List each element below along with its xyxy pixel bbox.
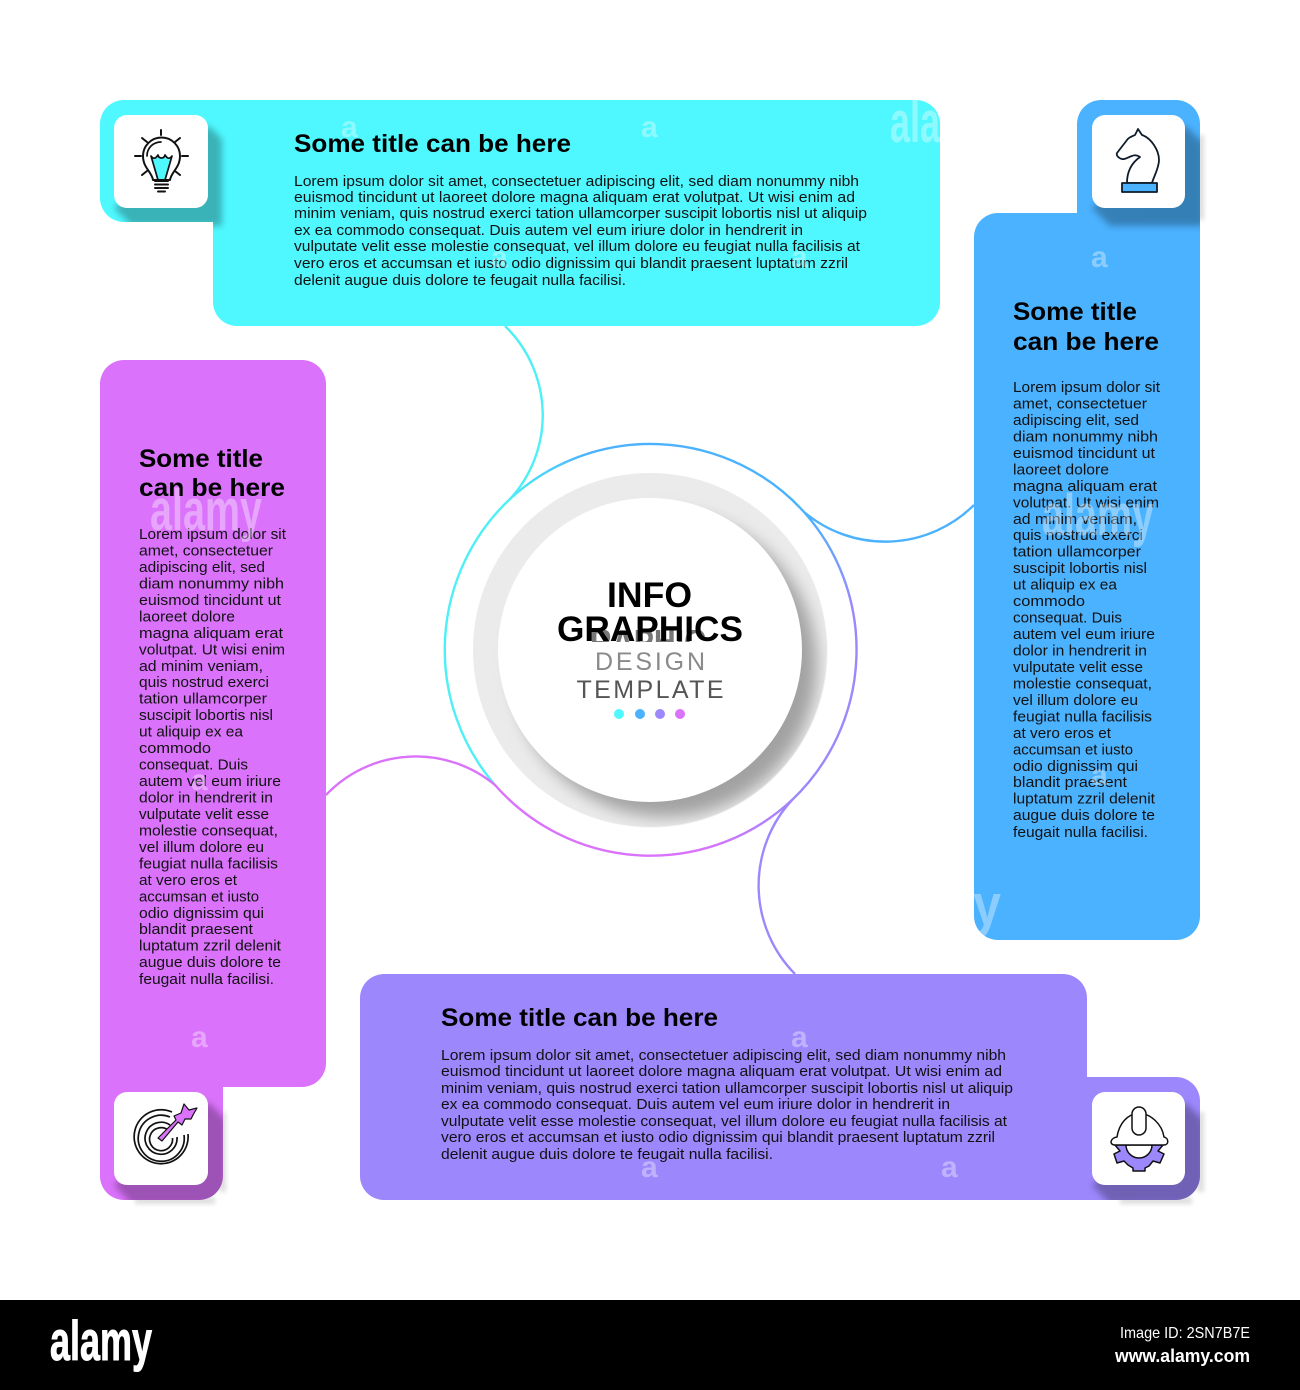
footer credits: Image ID: 2SN7B7E (1120, 1325, 1250, 1342)
body text: euismod tincidunt ut laoreet dolore magna aliquam erat volutpat. Ut wisi enim ad (294, 189, 855, 206)
central circle (473, 473, 827, 827)
body text: diam nonummy nibh (139, 575, 284, 592)
icon: light bulb (135, 130, 188, 192)
body text: vero eros et accumsan et iusto odio dignissim qui blandit praesent luptatum zzril (441, 1129, 995, 1146)
icon: chess knight (1117, 129, 1159, 192)
watermark overlays: a (791, 241, 808, 274)
body text: diam nonummy nibh (1013, 428, 1158, 445)
watermark overlays: a (1091, 759, 1108, 792)
body text: molestie consequat, (1013, 675, 1152, 692)
center title: RAPHIC (590, 623, 706, 662)
body text: volutpat. Ut wisi enim (1013, 494, 1159, 511)
watermark overlays: a (491, 241, 508, 274)
watermark overlays: a (791, 1021, 808, 1054)
soft outer panel shadows (135, 135, 1204, 1204)
body text: ut aliquip ex ea (139, 724, 244, 741)
body text: accumsan et iusto (1013, 741, 1133, 758)
body text: Lorem ipsum dolor sit amet, consectetuer adipiscing elit, sed diam nonummy nibh (441, 1047, 1006, 1064)
watermark overlays (150, 90, 1154, 1184)
watermark overlays: a (1091, 241, 1108, 274)
heading: can be here (1013, 328, 1159, 356)
body text: vulputate velit esse (1013, 659, 1143, 676)
body text: adipiscing elit, sed (1013, 412, 1139, 429)
icon: target with arrow (134, 1104, 197, 1164)
body text: tation ullamcorper (1013, 544, 1141, 561)
body text (1013, 379, 1161, 841)
connector curves (326, 326, 974, 974)
panel: bottom purple (360, 974, 1204, 1204)
body text: molestie consequat, (139, 822, 278, 839)
body text: euismod tincidunt ut (1013, 445, 1156, 462)
panel: top cyan (100, 100, 940, 326)
body text: euismod tincidunt ut (139, 592, 282, 609)
body text: laoreet dolore (139, 608, 235, 625)
body text: quis nostrud exerci (139, 674, 269, 691)
watermark overlays: a (341, 111, 358, 144)
body text: at vero eros et (1013, 725, 1112, 742)
body text: vulputate velit esse molestie consequat, vel illum dolore eu feugiat nulla facilisis at (441, 1113, 1008, 1130)
body text: ad minim veniam, (1013, 511, 1137, 528)
heading: Some title can be here (294, 130, 571, 158)
heading: Some title (139, 445, 263, 473)
body text: ex ea commodo consequat. Duis autem vel eum iriure dolor in hendrerit in (294, 222, 803, 239)
body text: blandit praesent (1013, 774, 1128, 791)
footer logo: alamy (50, 1309, 152, 1372)
body text: laoreet dolore (1013, 461, 1109, 478)
heading (1013, 298, 1159, 356)
watermark overlays: a (191, 764, 208, 797)
body text: feugait nulla facilisi. (139, 971, 274, 988)
body text: at vero eros et (139, 872, 238, 889)
watermark overlays: alamy (150, 478, 262, 543)
body text: volutpat. Ut wisi enim (139, 641, 285, 658)
body text: autem vel eum iriure (1013, 626, 1155, 643)
body text: commodo (1013, 593, 1085, 610)
body text: Lorem ipsum dolor sit (139, 526, 287, 543)
body text: luptatum zzril delenit (139, 938, 282, 955)
body text: ex ea commodo consequat. Duis autem vel eum iriure dolor in hendrerit in (441, 1096, 950, 1113)
body text: consequat. Duis (1013, 610, 1122, 627)
body text: euismod tincidunt ut laoreet dolore magna aliquam erat volutpat. Ut wisi enim ad (441, 1063, 1002, 1080)
body text: augue duis dolore te (1013, 807, 1155, 824)
footer credits: www.alamy.com (1114, 1346, 1250, 1366)
heading: can be here (139, 474, 285, 502)
body text: adipiscing elit, sed (139, 559, 265, 576)
body text: vero eros et accumsan et iusto odio dignissim qui blandit praesent luptatum zzril (294, 255, 848, 272)
footer credits (1114, 1325, 1250, 1366)
heading: Some title can be here (441, 1004, 718, 1032)
body text: accumsan et iusto (139, 888, 259, 905)
body text: vel illum dolore eu (139, 839, 264, 856)
center title: TEMPLATE (576, 676, 724, 704)
body text: autem vel eum iriure (139, 773, 281, 790)
watermark overlays: a (191, 1021, 208, 1054)
body text: ut aliquip ex ea (1013, 577, 1118, 594)
body text: consequat. Duis (139, 757, 248, 774)
body text: blandit praesent (139, 921, 254, 938)
body text: delenit augue duis dolore te feugait nulla facilisi. (294, 272, 626, 289)
body text: luptatum zzril delenit (1013, 791, 1156, 808)
panel: right blue (974, 100, 1204, 940)
watermark overlays: alamy (1042, 483, 1154, 548)
body text: magna aliquam erat (1013, 478, 1158, 495)
body text: amet, consectetuer (139, 542, 273, 560)
watermark overlays: a (941, 1151, 958, 1184)
footer bar (0, 1300, 1300, 1390)
body text: augue duis dolore te (139, 954, 281, 971)
body text: feugiat nulla facilisis (1013, 708, 1152, 725)
body text: suscipit lobortis nisl (1013, 560, 1147, 577)
body text: Lorem ipsum dolor sit amet, consectetuer adipiscing elit, sed diam nonummy nibh (294, 173, 859, 190)
body text (441, 1047, 1013, 1163)
body text: minim veniam, quis nostrud exerci tation ullamcorper suscipit lobortis nisl ut aliquip (294, 205, 867, 222)
center title: GRAPHICS (557, 610, 743, 649)
watermark overlays: y (973, 873, 1001, 938)
body text: odio dignissim qui (1013, 758, 1138, 775)
body text: odio dignissim qui (139, 905, 264, 922)
center title: DESIGN (595, 648, 705, 676)
body text: minim veniam, quis nostrud exerci tation ullamcorper suscipit lobortis nisl ut aliquip (441, 1080, 1013, 1097)
body text: vulputate velit esse molestie consequat, vel illum dolore eu feugiat nulla facilisis at (294, 238, 861, 255)
center title: INFO (607, 576, 692, 615)
body text: dolor in hendrerit in (1013, 642, 1147, 660)
body text: commodo (139, 740, 211, 757)
body text: dolor in hendrerit in (139, 790, 273, 806)
body text: feugiat nulla facilisis (139, 855, 278, 872)
watermark overlays: ala (890, 90, 940, 155)
heading: Some title (1013, 298, 1137, 326)
body text: feugait nulla facilisi. (1013, 824, 1148, 841)
panel: left pink (100, 360, 326, 1204)
body text (139, 526, 287, 988)
center title (558, 582, 742, 698)
body text: Lorem ipsum dolor sit (1013, 379, 1161, 396)
body text: ad minim veniam, (139, 658, 263, 675)
icon: helmet and gear (1111, 1107, 1168, 1171)
color dots (614, 709, 685, 719)
body text (294, 173, 867, 289)
body text: quis nostrud exerci (1013, 527, 1143, 544)
heading (139, 445, 285, 502)
body text: vulputate velit esse (139, 806, 269, 823)
body text: suscipit lobortis nisl (139, 707, 273, 724)
body text: tation ullamcorper (139, 691, 267, 708)
body text: amet, consectetuer (1013, 396, 1147, 412)
watermark overlays: a (641, 111, 658, 144)
body text: magna aliquam erat (139, 625, 284, 642)
body text: delenit augue duis dolore te feugait nulla facilisi. (441, 1146, 773, 1163)
body text: vel illum dolore eu (1013, 692, 1138, 709)
watermark overlays: a (641, 1151, 658, 1184)
